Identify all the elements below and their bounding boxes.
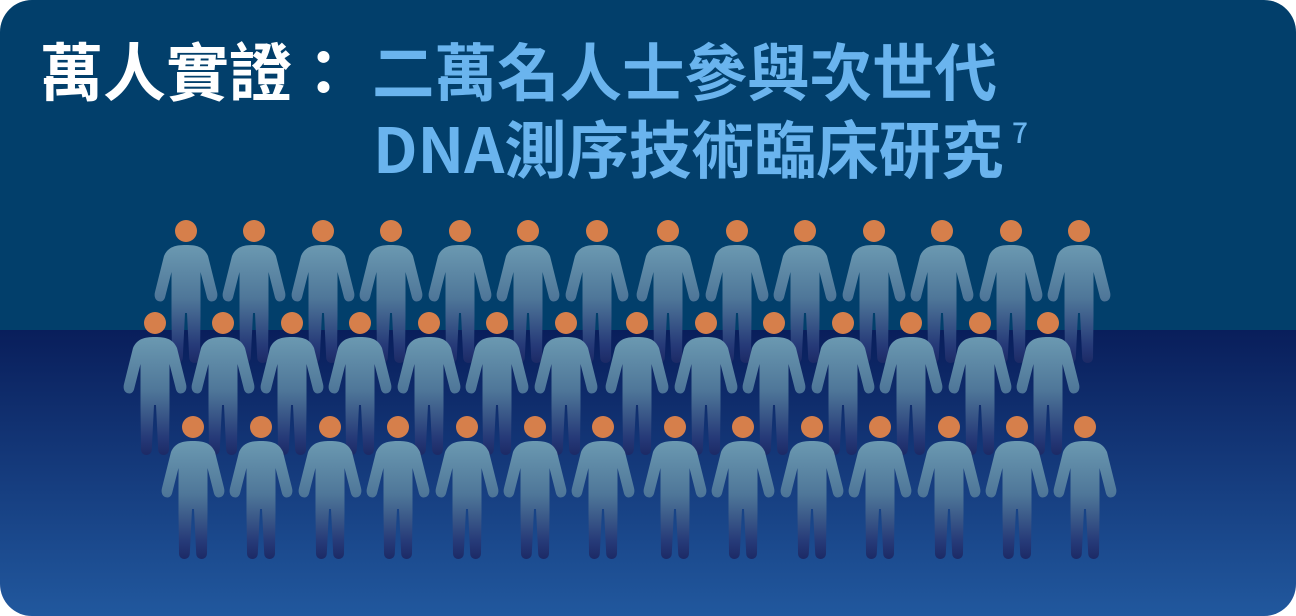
title bbox=[40, 22, 1028, 191]
heading: study line one: 二萬名人士參與次世代 bbox=[372, 22, 997, 114]
middle row of people bbox=[124, 312, 1079, 455]
heading: study line two: DNA測序技術臨床研究 bbox=[373, 101, 1003, 191]
back row of people bbox=[155, 220, 1110, 363]
people illustration bbox=[124, 220, 1116, 559]
footnote reference: 7 bbox=[1012, 112, 1028, 152]
front row of people bbox=[162, 416, 1116, 559]
heading: label: 萬人實證： bbox=[40, 24, 355, 114]
